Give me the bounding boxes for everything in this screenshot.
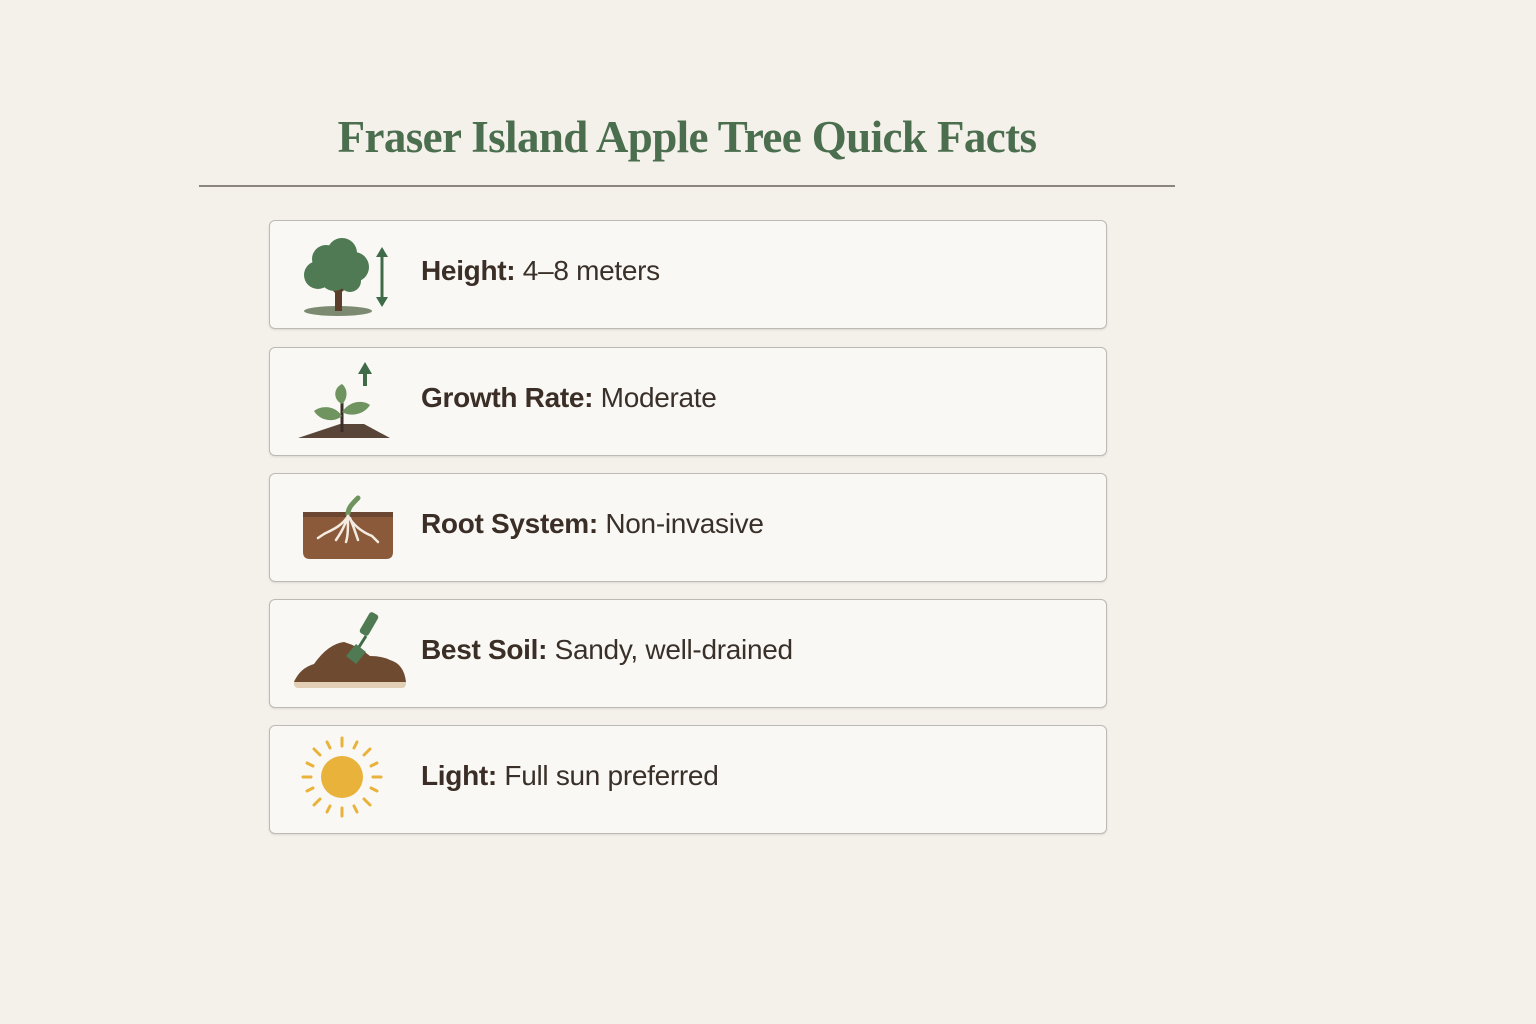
icon: sun — [302, 736, 382, 818]
card: root system — [269, 473, 1107, 582]
card: growth rate — [269, 347, 1107, 456]
icon: soil mound with trowel — [294, 612, 406, 688]
text: root system: Root System: Non-invasive — [421, 508, 764, 539]
card: light — [269, 725, 1107, 834]
icon: sprout with up arrow — [298, 362, 390, 438]
icon: roots in soil — [303, 496, 393, 559]
text: height: Height: 4–8 meters — [421, 255, 660, 286]
title: Fraser Island Apple Tree Quick Facts — [338, 112, 1036, 162]
text: light: Light: Full sun preferred — [421, 760, 718, 791]
text: best soil: Best Soil: Sandy, well-drained — [421, 634, 793, 665]
card: best soil — [269, 599, 1107, 708]
card: height — [269, 220, 1107, 329]
text: growth rate: Growth Rate: Moderate — [421, 382, 717, 413]
icon: tree with height arrow — [304, 238, 388, 316]
